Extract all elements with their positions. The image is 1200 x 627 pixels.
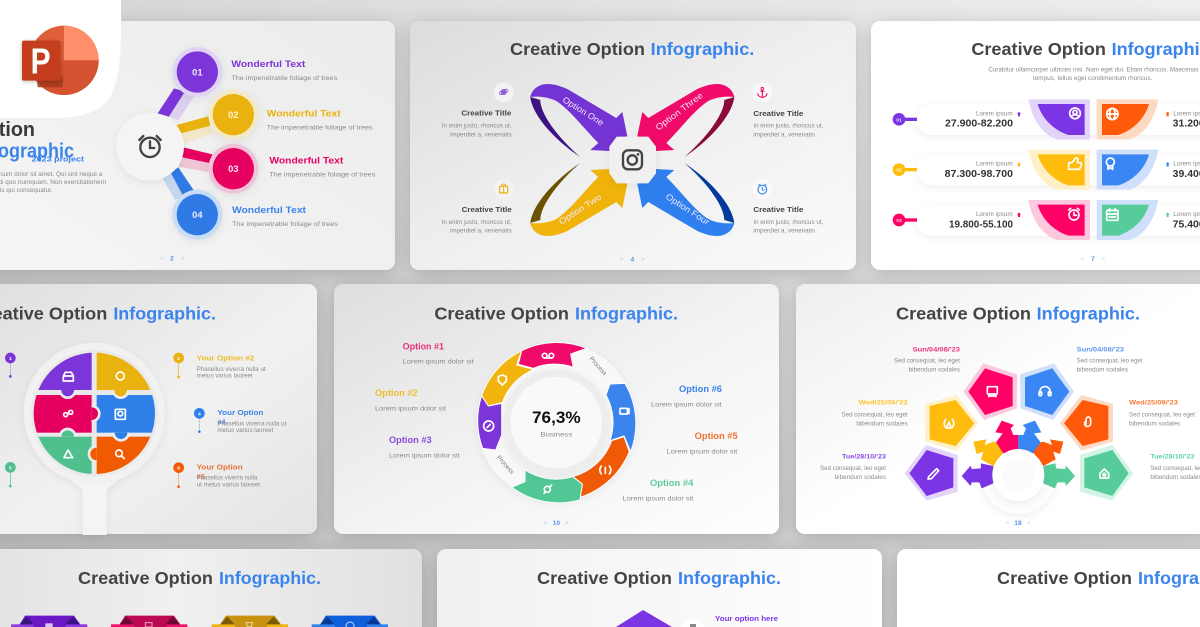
title: Infographic. — [113, 303, 216, 323]
pin 2: 2 — [177, 356, 180, 362]
text: creative title bottom left: Creative Title — [462, 205, 512, 214]
row 2 — [893, 150, 1200, 190]
label: option 1 — [403, 341, 474, 366]
title: Creative Option — [971, 39, 1106, 59]
hub ring — [981, 439, 1056, 514]
label: green date: Tue/28/10/'23 — [1150, 453, 1195, 460]
page number: 7 — [1091, 256, 1095, 263]
page number — [1081, 256, 1105, 263]
label: purple date: Sed consequat, leo eget — [820, 465, 886, 472]
text: item 3: Wonderful Text — [269, 156, 343, 166]
label: blue date: Sed consequat, leo eget — [1077, 358, 1143, 365]
row 3: 19.800-55.100 — [949, 219, 1013, 230]
process labels — [495, 356, 608, 476]
text: option 4: #4 — [217, 417, 226, 426]
label: option 4: Lorem ipsum dolor sit — [623, 495, 693, 502]
ribbon tile: yellow — [212, 616, 288, 627]
pentagon: yellow — [925, 395, 978, 451]
icon: anchor — [752, 82, 772, 102]
icon: clock — [752, 179, 772, 199]
text: option 4: Your Option — [217, 408, 264, 417]
label: orange date — [1129, 400, 1195, 427]
text: option 4: Phasellus viverra nulla ut — [217, 420, 287, 427]
label: yellow date: Wed/25/09/'23 — [859, 400, 908, 407]
text: item 3: The impenetrable foliage of trees — [269, 172, 375, 179]
text: creative title top right — [753, 109, 824, 139]
label: option 5: Option #5 — [695, 431, 738, 441]
text: creative title top right: In enim justo, rhoncus ut, — [753, 123, 824, 130]
panel: slide 4 arrows — [410, 21, 856, 270]
label: green date — [1150, 453, 1200, 481]
arrow fan — [962, 421, 1075, 501]
text: item 2: The impenetrable foliage of trees — [267, 124, 373, 131]
text: item 4: The impenetrable foliage of trees — [232, 221, 338, 228]
pin 1: 1 — [9, 356, 12, 362]
pin 5: 5 — [9, 465, 12, 471]
title: Creative Option — [537, 568, 672, 588]
title — [997, 568, 1200, 588]
arrow labels: Option One — [561, 95, 606, 128]
label: option 6: Option #6 — [679, 384, 722, 394]
pin 5 — [5, 462, 16, 487]
left text block: rsum dolor sit amet. Qui sint neque a — [0, 171, 103, 178]
text: option 2 — [197, 353, 266, 379]
pentagon: purple — [904, 445, 958, 501]
title — [896, 303, 1140, 323]
subtitle: Curabitur ullamcorper ultricies nisi. Nam eget dui. Etiam rhoncus. Maecenas — [988, 66, 1199, 73]
title: Creative Option — [997, 568, 1132, 588]
panel: slide 7 value rows — [871, 21, 1200, 270]
text: option 6: #6 — [197, 472, 205, 481]
label: purple date: Tue/28/10/'23 — [842, 453, 886, 460]
text: creative title bottom left — [442, 205, 512, 235]
pin 4: 4 — [198, 411, 201, 417]
title: Infographic. — [678, 568, 781, 588]
panel: bottom left slide — [0, 549, 422, 627]
label: purple date — [820, 453, 886, 481]
label: option 2 — [375, 388, 446, 413]
node 01: 01 — [192, 67, 203, 77]
left text block: 2023 project — [32, 154, 85, 163]
row 1: 01 — [896, 117, 902, 123]
text: creative title top right: Creative Title — [753, 109, 803, 118]
panel: slide 6 puzzle magnifier — [0, 284, 317, 535]
title — [971, 39, 1200, 59]
text: creative title top left: imperdiet a, venenatis — [450, 131, 512, 138]
text: creative title top left: In enim justo, rhoncus ut, — [442, 122, 512, 129]
label: option 3: Option #3 — [389, 435, 432, 445]
label: option 3: Lorem ipsum dolor sit — [389, 453, 460, 460]
arrow labels: Option Two — [557, 192, 603, 227]
label: blue date — [1077, 346, 1143, 374]
text: option 6: Your Option — [197, 463, 243, 472]
label: pink date — [894, 346, 960, 374]
arrow: option two — [530, 163, 627, 236]
left text block: di quo numquam. Non exercitationem — [0, 179, 106, 186]
label: blue date: Sun/04/08/'23 — [1077, 346, 1124, 353]
row 3 — [893, 200, 1200, 240]
text: option 6 — [197, 463, 260, 488]
text: option 4: metus varius laoreet — [217, 427, 274, 434]
label: option 1: Lorem ipsum dolor sit — [403, 359, 474, 366]
text: creative title bottom right: Creative Title — [753, 205, 803, 214]
title: Infographic. — [219, 568, 321, 588]
node circle — [681, 619, 705, 627]
title: Creative Option — [510, 39, 645, 59]
panel: slide 10 ring chart — [334, 284, 779, 534]
arrow: option three — [637, 84, 734, 157]
label: blue date: bibendum sodales — [1077, 367, 1128, 374]
text: item 2: Wonderful Text — [267, 108, 341, 118]
label: option 6: Lorem ipsum dolor sit — [651, 402, 722, 409]
label: option 5 — [667, 431, 738, 456]
text: creative title bottom right: In enim justo, rhoncus ut, — [753, 219, 824, 226]
label: pink date: Sun/04/08/'23 — [913, 346, 960, 353]
text: creative title bottom right — [753, 205, 824, 235]
ring segments — [478, 342, 636, 503]
label: purple date: bibendum sodales — [835, 474, 886, 481]
label: pink date: Sed consequat, leo eget — [894, 358, 960, 365]
label: yellow date: bibendum sodales — [856, 420, 908, 427]
row 3: 03 — [896, 218, 902, 224]
text: creative title top left — [442, 109, 512, 138]
node 04: 04 — [192, 210, 203, 220]
node 03: 03 — [228, 164, 239, 174]
label: option 4: Option #4 — [650, 478, 693, 488]
label: option 1: Option #1 — [403, 341, 444, 351]
title: Infographic. — [575, 303, 678, 323]
title: Infographic. — [1037, 303, 1140, 323]
text: option 2: metus varius laoreet — [197, 372, 253, 379]
row 1 — [893, 99, 1200, 139]
text: item 4 — [232, 205, 338, 228]
text: option 2: Your Option #2 — [197, 353, 254, 362]
row 2: 02 — [896, 168, 902, 174]
title — [510, 39, 754, 59]
text: creative title top left: Creative Title — [461, 109, 511, 118]
title — [537, 568, 781, 588]
label: orange date: bibendum sodales — [1129, 420, 1180, 427]
text: item 1: Wonderful Text — [231, 59, 305, 69]
title — [78, 568, 321, 588]
text: option 4 — [217, 408, 287, 434]
node 03 — [208, 144, 258, 194]
title: Creative Option — [78, 568, 213, 588]
arrow labels: Option Three — [654, 90, 705, 132]
connectors — [158, 88, 213, 200]
row 2: Lorem ipsum — [976, 161, 1013, 168]
icon: alarm clock hub — [116, 113, 184, 181]
puzzle icons — [63, 372, 125, 459]
arrow: option four — [637, 163, 734, 236]
label: option 2: Option #2 — [375, 388, 418, 398]
center value: Business — [540, 431, 573, 438]
title: Creative Option — [434, 303, 569, 323]
label: orange date: Wed/25/09/'23 — [1129, 400, 1178, 407]
ribbon tile: purple — [11, 616, 87, 627]
page number — [620, 256, 644, 263]
option label: Your option here — [715, 614, 778, 623]
pentagon: orange — [1060, 395, 1113, 451]
center value — [503, 369, 610, 476]
title: Infographic. — [651, 39, 754, 59]
page number — [160, 256, 184, 263]
node 04 — [172, 190, 222, 240]
icon: instagram hub — [609, 137, 656, 183]
icon: planet — [494, 82, 514, 102]
panel: slide 2 wonderful text — [0, 21, 395, 270]
text: item 1: The impenetrable foliage of trees — [231, 75, 337, 82]
text: creative title bottom right: imperdiet a, venenatis — [753, 228, 815, 235]
text: creative title top right: imperdiet a, venenatis — [753, 132, 815, 139]
arrow: option one — [530, 84, 627, 157]
ribbon tile: blue — [312, 616, 388, 627]
pentagon tip — [616, 610, 672, 627]
left text block — [0, 119, 106, 194]
panel: bottom middle slide — [437, 549, 882, 627]
page number: 10 — [553, 520, 560, 527]
title — [0, 303, 216, 323]
text: option 2: Phasellus viverra nulla ut — [197, 366, 266, 373]
panel: bottom right slide — [897, 549, 1200, 627]
pin 4 — [194, 408, 205, 433]
process labels: Process — [495, 454, 515, 476]
arrow labels — [557, 90, 711, 227]
process labels: Process — [588, 356, 608, 377]
text: item 2 — [267, 108, 373, 131]
text: item 1 — [231, 59, 337, 82]
row 1: Lorem ipsum — [976, 110, 1013, 117]
text: option 6: ut metus varius laoreet — [197, 481, 260, 488]
node 02: 02 — [228, 110, 239, 120]
row 3: Lorem ipsum — [976, 211, 1013, 218]
label: orange date: Sed consequat, leo eget — [1129, 411, 1195, 418]
pentagon: pink — [963, 363, 1017, 420]
text: item 3 — [269, 156, 375, 179]
ribbon tile: pink — [111, 616, 187, 627]
label: option 6 — [651, 384, 722, 409]
page number: 4 — [630, 256, 634, 263]
row 1: 27.900-82.200 — [945, 119, 1013, 130]
label: option 5: Lorem ipsum dolor sit — [667, 449, 737, 456]
text: option 6: Phasellus viverra nulla — [197, 475, 258, 482]
pin 6: 6 — [177, 466, 180, 472]
label: yellow date — [842, 400, 908, 427]
arrow labels: Option Four — [664, 191, 711, 227]
label: yellow date: Sed consequat, leo eget — [842, 411, 908, 418]
ring base — [477, 342, 636, 501]
text: creative title bottom left: In enim justo, rhoncus ut, — [442, 219, 512, 226]
pin 6 — [173, 462, 184, 488]
label: option 4 — [623, 478, 693, 502]
pin 1 — [5, 353, 16, 378]
label: option 3 — [389, 435, 460, 460]
subtitle — [988, 66, 1199, 82]
node 01 — [172, 47, 222, 97]
page number: 18 — [1014, 520, 1022, 527]
center value: 76,3% — [532, 408, 581, 427]
magnifier body — [24, 343, 165, 535]
label: option 2: Lorem ipsum dolor sit — [375, 406, 446, 413]
text: item 4: Wonderful Text — [232, 205, 306, 215]
pentagon: blue — [1020, 363, 1074, 420]
icon: robot — [494, 179, 514, 199]
panel: slide 18 pentagons — [796, 284, 1200, 534]
node 02 — [208, 90, 258, 140]
text: creative title bottom left: imperdiet a, venenatis — [450, 228, 512, 235]
puzzle pieces — [31, 350, 158, 477]
page number — [1006, 520, 1030, 527]
left text block: ographic — [0, 140, 74, 162]
page number — [544, 520, 568, 527]
logo: powerpoint badge — [0, 0, 121, 118]
left text block: is qui consequatur. — [0, 187, 53, 194]
title: Creative Option — [896, 303, 1031, 323]
page number: 2 — [170, 256, 174, 263]
title — [434, 303, 678, 323]
pin 2 — [173, 353, 184, 378]
ring icons — [484, 353, 629, 493]
subtitle: tempus, tellus eget condimentum rhoncus. — [1033, 75, 1153, 82]
pentagon: green — [1080, 445, 1133, 501]
row 2: 87.300-98.700 — [945, 169, 1013, 180]
label: pink date: bibendum sodales — [909, 367, 960, 374]
logo: powerpoint badge: P — [31, 40, 51, 81]
